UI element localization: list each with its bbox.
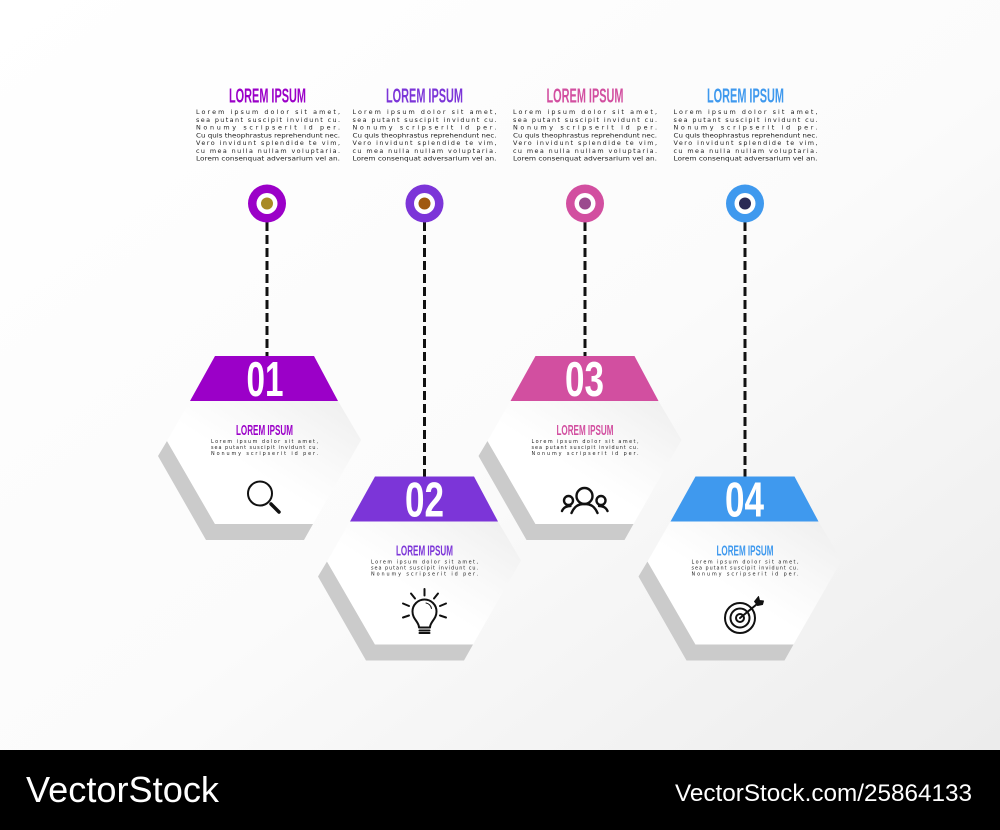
footer url: VectorStock.com/25864133 (675, 780, 972, 807)
hexagon card 03 (478, 353, 682, 540)
card text 01 (211, 439, 318, 457)
connector line 4 (744, 222, 746, 477)
hexagon card 04 (638, 474, 842, 660)
paragraph 2: Lorem consenquat adversarium vel an. (352, 154, 496, 162)
paragraph 4: cu mea nulla nullam voluptaria. (674, 147, 818, 155)
paragraph 4: Lorem consenquat adversarium vel an. (674, 154, 818, 162)
connector line 1 (266, 222, 268, 356)
band 04 (670, 476, 818, 522)
icon: light bulb (403, 589, 446, 633)
paragraph 4: Nonumy scripserit id per. (674, 124, 818, 132)
paragraph 4: sea putant suscipit invidunt cu. (674, 116, 818, 124)
card text 04 (692, 560, 799, 578)
paragraph 4: Cu quis theophrastus reprehendunt nec. (674, 132, 818, 140)
card text 04: sea putant suscipit invidunt cu. (692, 566, 799, 572)
card title 01: LOREM IPSUM (236, 423, 293, 439)
marker 2 (406, 184, 444, 222)
card text 03: Lorem ipsum dolor sit amet, (532, 439, 639, 445)
band 02 (350, 476, 498, 522)
paragraph 1: Nonumy scripserit id per. (196, 124, 340, 132)
card text 02: sea putant suscipit invidunt cu. (371, 566, 478, 572)
column 3 top text (513, 86, 657, 162)
icon: target with arrow (725, 596, 764, 633)
card text 03: Nonumy scripserit id per. (532, 451, 639, 457)
paragraph 2: Lorem ipsum dolor sit amet, (352, 108, 496, 116)
card title 02: LOREM IPSUM (396, 544, 453, 560)
card text 02 (371, 560, 478, 578)
paragraph 2: cu mea nulla nullam voluptaria. (352, 147, 496, 155)
connector line 2 (423, 222, 426, 477)
card title 03: LOREM IPSUM (556, 423, 614, 439)
paragraph 3: sea putant suscipit invidunt cu. (513, 116, 657, 124)
paragraph 4 (674, 108, 818, 162)
card text 03: sea putant suscipit invidunt cu. (532, 445, 639, 451)
card text 01: sea putant suscipit invidunt cu. (211, 445, 318, 451)
paragraph 3: Cu quis theophrastus reprehendunt nec. (513, 132, 657, 140)
paragraph 2 (352, 108, 496, 162)
paragraph 4: Lorem ipsum dolor sit amet, (674, 108, 818, 116)
paragraph 1 (196, 108, 340, 162)
paragraph 3: Vero invidunt splendide te vim, (513, 139, 657, 147)
card text 04: Nonumy scripserit id per. (692, 572, 799, 578)
paragraph 4: Vero invidunt splendide te vim, (674, 139, 818, 147)
paragraph 1: cu mea nulla nullam voluptaria. (196, 147, 340, 155)
heading 3: LOREM IPSUM (546, 86, 624, 108)
card text 03 (532, 439, 639, 457)
number 02: 02 (405, 474, 444, 528)
paragraph 2: Nonumy scripserit id per. (352, 124, 496, 132)
number 03: 03 (565, 353, 604, 407)
heading 2: LOREM IPSUM (386, 86, 463, 108)
icon: people (562, 488, 608, 513)
number 01: 01 (246, 353, 284, 407)
band 03 (510, 356, 658, 401)
column 4 top text (674, 86, 818, 162)
paragraph 1: sea putant suscipit invidunt cu. (196, 116, 340, 124)
hexagon card 01 (158, 353, 361, 540)
paragraph 2: sea putant suscipit invidunt cu. (352, 116, 496, 124)
paragraph 3: Lorem ipsum dolor sit amet, (513, 108, 657, 116)
paragraph 1: Cu quis theophrastus reprehendunt nec. (196, 132, 340, 140)
card text 04: Lorem ipsum dolor sit amet, (692, 560, 799, 566)
card text 01: Lorem ipsum dolor sit amet, (211, 439, 318, 445)
paragraph 3: cu mea nulla nullam voluptaria. (513, 147, 657, 155)
footer brand: VectorStock (26, 769, 220, 810)
card text 01: Nonumy scripserit id per. (211, 451, 318, 457)
marker 1 (248, 184, 286, 222)
footer bar (0, 750, 1000, 830)
connector line 3 (584, 222, 586, 356)
card text 02: Lorem ipsum dolor sit amet, (371, 560, 478, 566)
marker 4 (726, 184, 764, 222)
card title 04: LOREM IPSUM (716, 544, 774, 560)
heading 4: LOREM IPSUM (707, 86, 784, 108)
paragraph 2: Vero invidunt splendide te vim, (352, 139, 496, 147)
paragraph 1: Lorem consenquat adversarium vel an. (196, 154, 340, 162)
column 1 top text (196, 86, 340, 162)
paragraph 3: Nonumy scripserit id per. (513, 124, 657, 132)
band 01 (190, 356, 338, 401)
hexagon card 02 (318, 474, 521, 660)
paragraph 3: Lorem consenquat adversarium vel an. (513, 154, 657, 162)
paragraph 2: Cu quis theophrastus reprehendunt nec. (352, 132, 496, 140)
paragraph 1: Vero invidunt splendide te vim, (196, 139, 340, 147)
heading 1: LOREM IPSUM (229, 86, 306, 108)
card text 02: Nonumy scripserit id per. (371, 572, 478, 578)
paragraph 1: Lorem ipsum dolor sit amet, (196, 108, 340, 116)
column 2 top text (352, 86, 496, 162)
icon: magnifier (248, 482, 279, 512)
marker 3 (566, 184, 604, 222)
number 04: 04 (725, 474, 764, 528)
paragraph 3 (513, 108, 657, 162)
